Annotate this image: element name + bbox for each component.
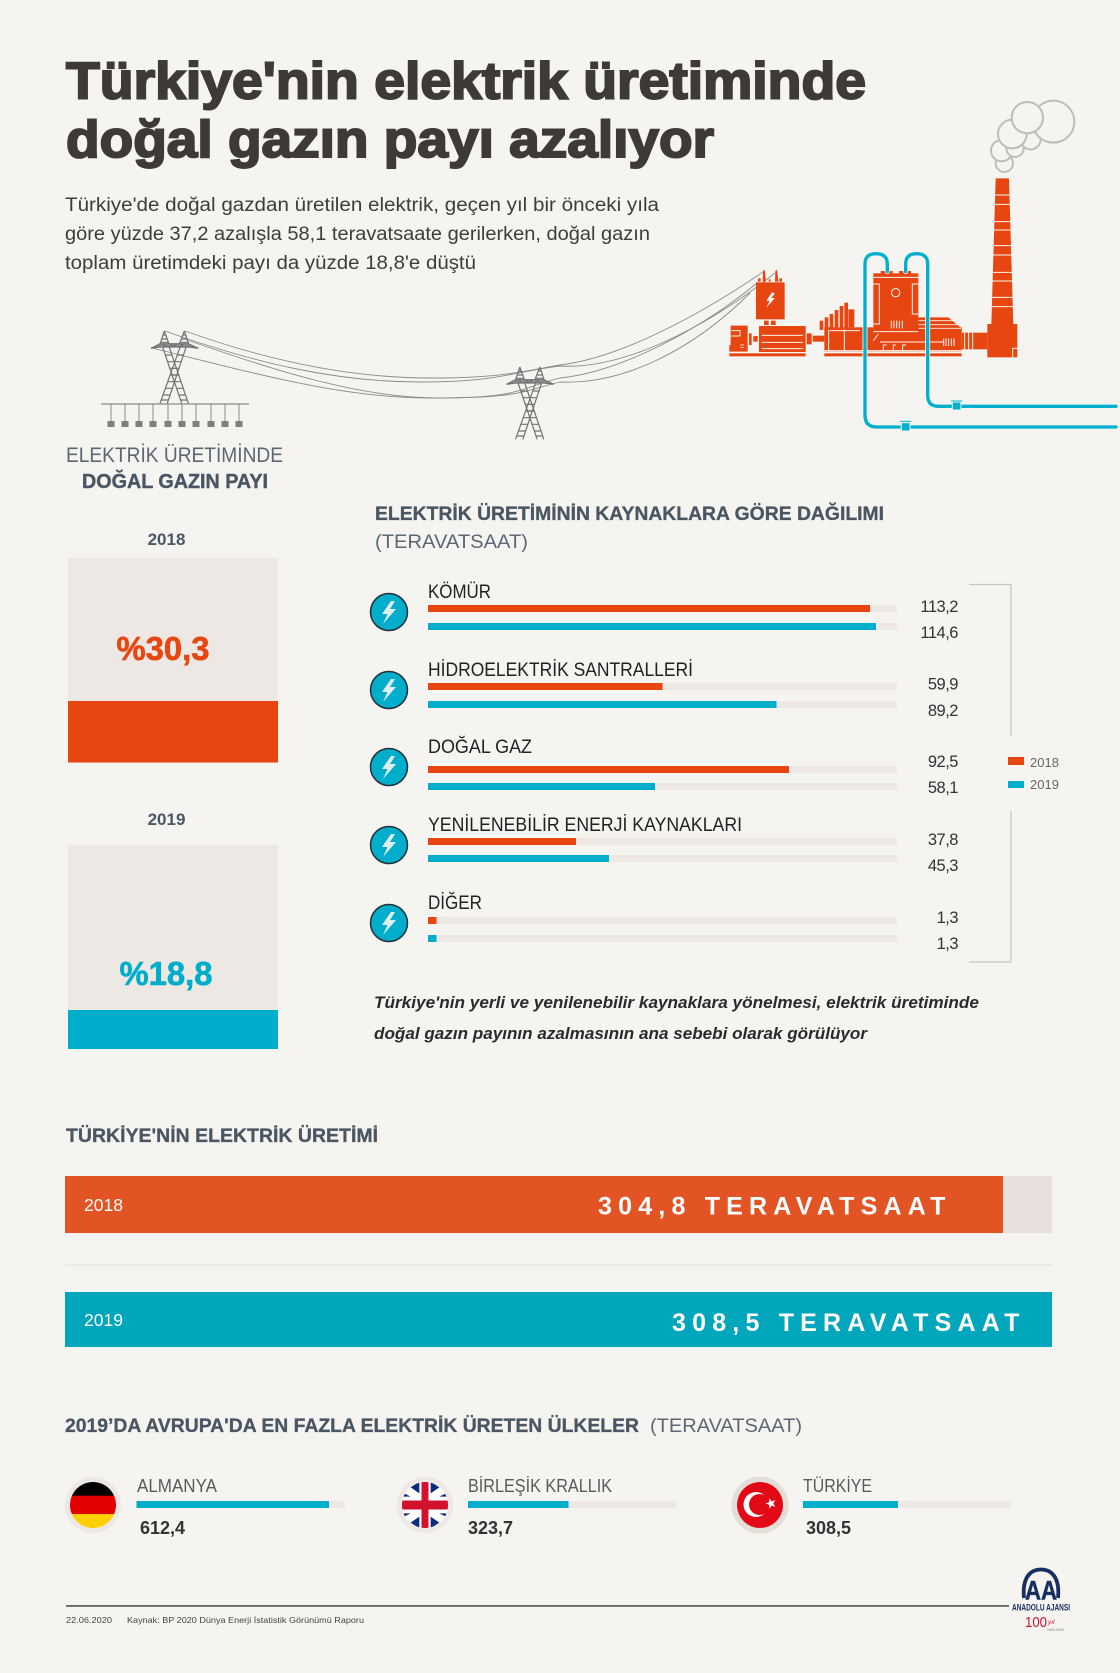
row: coal	[370, 582, 958, 642]
legend with bracket: 2019	[1030, 777, 1059, 792]
icon: smoke clouds	[991, 101, 1074, 172]
heading: top European producers: (TERAVATSAAT)	[650, 1415, 802, 1437]
row: hydro: HİDROELEKTRİK SANTRALLERİ	[428, 660, 693, 681]
row: coal: 113,2	[920, 598, 958, 616]
country: Türkiye: TÜRKİYE	[803, 1476, 872, 1496]
row: renewables: YENİLENEBİLİR ENERJİ KAYNAKLARI	[428, 815, 742, 836]
row: coal: KÖMÜR	[428, 582, 491, 603]
panel: 2019 share: %18,8	[120, 955, 212, 992]
pipes	[865, 254, 1116, 427]
footer rule	[66, 1605, 1009, 1607]
heading: total production: TÜRKİYE'NİN ELEKTRİK ÜRETİMİ	[66, 1126, 378, 1147]
row: natural gas: DOĞAL GAZ	[428, 736, 532, 758]
bar: 2019 total: 308,5 TERAVATSAAT	[672, 1309, 1026, 1337]
icon: transmission tower left with ground line	[101, 331, 249, 427]
row: hydro: 59,9	[928, 676, 958, 694]
panel: 2018 share: 2018	[148, 530, 185, 549]
logo: Anadolu Ajansı: 100	[1025, 1614, 1047, 1631]
icon: transformer with lightning bolt	[756, 269, 785, 319]
row: hydro: 89,2	[928, 702, 958, 720]
heading: distribution by source: (TERAVATSAAT)	[375, 531, 528, 553]
row: other: 1,3	[937, 909, 958, 927]
heading: share of natural gas: DOĞAL GAZIN PAYI	[82, 469, 268, 493]
country: United Kingdom: 323,7	[468, 1518, 513, 1538]
bar: 2019 total	[65, 1292, 1052, 1347]
title: doğal gazın payı azalıyor	[66, 111, 714, 169]
intro paragraph	[65, 195, 659, 274]
row: other: 1,3	[937, 935, 958, 953]
italic note: Türkiye'nin yerli ve yenilenebilir kaynaklara yönelmesi, elektrik üretiminde	[374, 993, 979, 1012]
bar: 2018 total: 304,8 TERAVATSAAT	[598, 1192, 952, 1220]
row: renewables	[370, 815, 958, 875]
panel: 2018 share	[68, 530, 278, 762]
bar: 2019 total: 2019	[84, 1310, 123, 1330]
heading: share of natural gas: ELEKTRİK ÜRETİMİNDE	[66, 444, 283, 467]
panel: 2018 share: %30,3	[116, 630, 210, 667]
logo: Anadolu Ajansı: AA	[1025, 1576, 1057, 1606]
row: renewables: 37,8	[928, 831, 958, 849]
pipe valves	[900, 400, 963, 431]
illustration: power lines	[152, 272, 775, 398]
country: Germany: ALMANYA	[137, 1476, 217, 1496]
title: Türkiye'nin elektrik üretiminde	[66, 52, 866, 110]
logo: Anadolu Ajansı: 1920-2020	[1047, 1628, 1064, 1632]
bar chart: sources	[370, 582, 958, 953]
country: United Kingdom	[397, 1476, 676, 1538]
row: natural gas: 92,5	[928, 753, 958, 771]
panel: 2019 share: 2019	[148, 810, 185, 829]
row: coal: 114,6	[920, 624, 958, 642]
icon: Turkish flag	[732, 1476, 788, 1534]
intro paragraph: Türkiye'de doğal gazdan üretilen elektrik, geçen yıl bir önceki yıla	[65, 195, 659, 216]
country: United Kingdom: BİRLEŞİK KRALLIK	[468, 1476, 612, 1496]
row: renewables: 45,3	[928, 857, 958, 875]
legend with bracket	[969, 584, 1059, 962]
icon: German flag	[65, 1477, 121, 1533]
country: Türkiye	[732, 1476, 1011, 1538]
chimney	[987, 178, 1017, 357]
country: Türkiye: 308,5	[806, 1518, 851, 1538]
italic note: doğal gazın payının azalmasının ana sebebi olarak görülüyor	[374, 1024, 868, 1043]
icon: transmission tower middle	[506, 367, 554, 439]
icon: UK flag	[397, 1477, 453, 1533]
country: Germany	[65, 1476, 345, 1538]
footer source: Kaynak: BP 2020 Dünya Enerji İstatistik Görünümü Raporu	[127, 1615, 364, 1625]
title	[66, 52, 866, 169]
bar: 2018 total: 2018	[84, 1195, 123, 1215]
row: natural gas: 58,1	[928, 779, 958, 797]
bar: 2018 total	[65, 1176, 1052, 1233]
row: other	[370, 892, 958, 953]
country: Germany: 612,4	[140, 1518, 185, 1538]
italic note	[374, 993, 979, 1043]
logo: Anadolu Ajansı	[1012, 1570, 1070, 1632]
intro paragraph: toplam üretimdeki payı da yüzde 18,8'e düştü	[65, 253, 476, 274]
heading: distribution by source	[375, 503, 884, 553]
heading: top European producers: 2019’DA AVRUPA'DA EN FAZLA ELEKTRİK ÜRETEN ÜLKELER	[65, 1416, 639, 1437]
footer source: 22.06.2020	[66, 1615, 112, 1625]
intro paragraph: göre yüzde 37,2 azalışla 58,1 teravatsaate gerilerken, doğal gazın	[65, 224, 650, 245]
row: natural gas	[370, 736, 958, 797]
legend with bracket: 2018	[1030, 755, 1059, 770]
illustration: power plant	[729, 101, 1116, 431]
panel: 2019 share	[68, 810, 278, 1049]
row: other: DİĞER	[428, 892, 482, 914]
heading: share of natural gas	[66, 444, 283, 493]
plant machinery	[729, 271, 987, 356]
heading: distribution by source: ELEKTRİK ÜRETİMİNİN KAYNAKLARA GÖRE DAĞILIMI	[375, 503, 884, 525]
row: hydro	[370, 660, 958, 720]
logo: Anadolu Ajansı: yıl	[1047, 1619, 1055, 1626]
logo: Anadolu Ajansı: ANADOLU AJANSI	[1012, 1602, 1070, 1612]
